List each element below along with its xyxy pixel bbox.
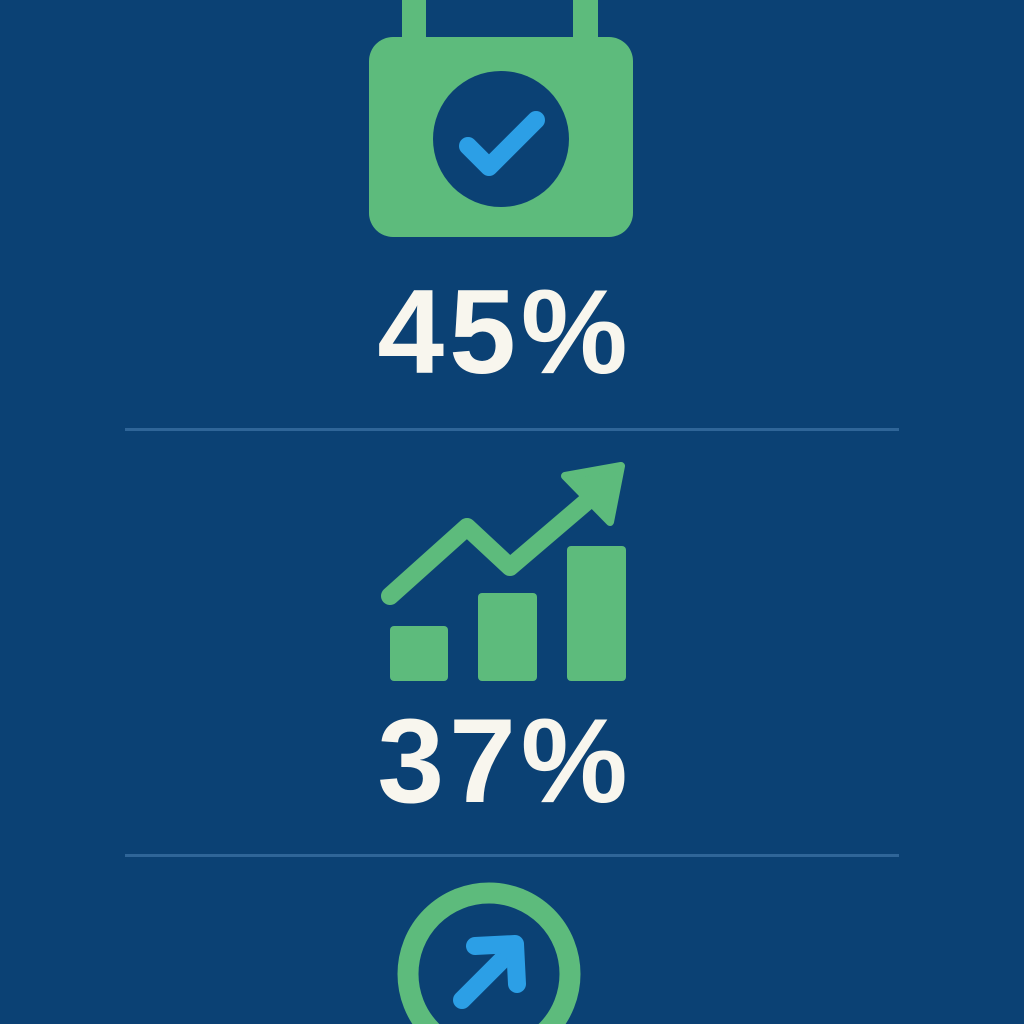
divider xyxy=(125,854,899,857)
icon: magnifier with arrow xyxy=(398,882,580,1024)
icon: growth chart xyxy=(381,462,626,681)
divider xyxy=(125,428,899,431)
stat: 45%: 45% xyxy=(377,265,633,399)
stat: 37%: 37% xyxy=(377,694,633,828)
